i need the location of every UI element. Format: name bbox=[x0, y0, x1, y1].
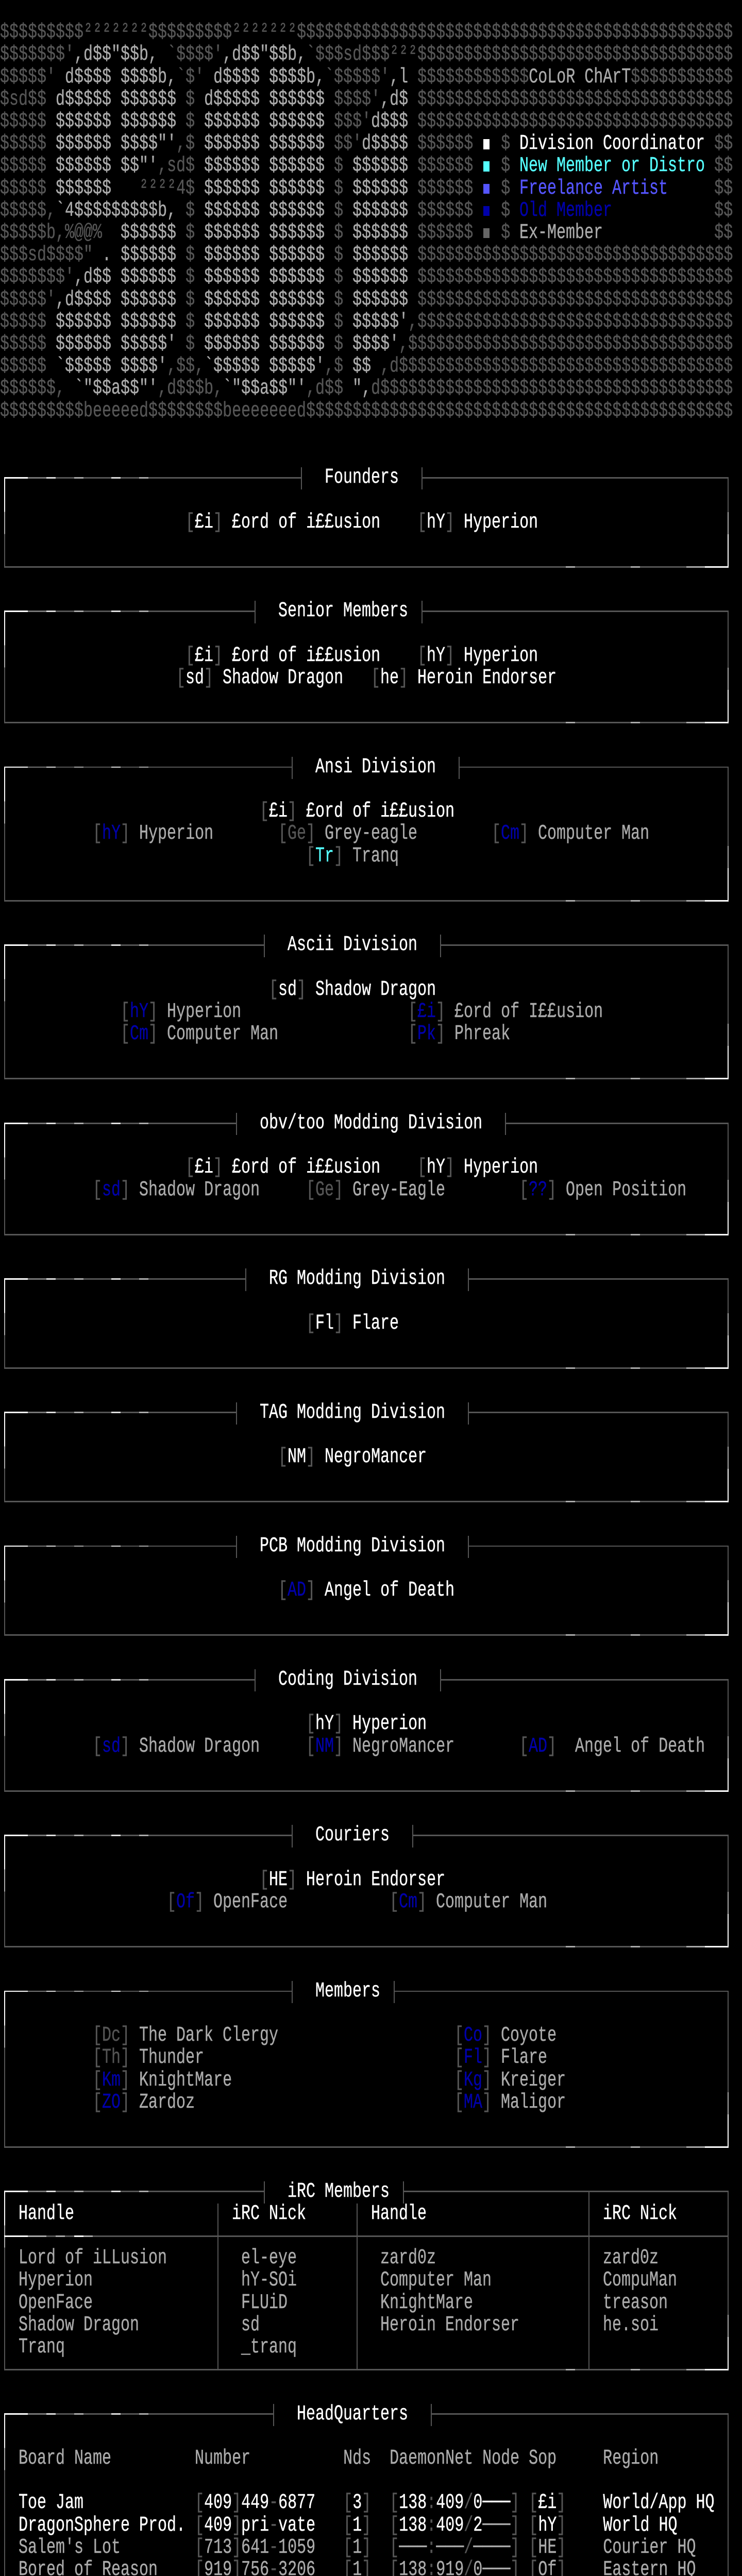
member: Lord of Illusion: [£i] £ord of i££usion bbox=[260, 800, 454, 824]
member: NegroMancer: [NM] NegroMancer bbox=[306, 1735, 454, 1758]
table row: FLUiD: FLUiD bbox=[241, 2291, 288, 2315]
ascii art logo banner: $$$$$' d$$$$ $$$$b,`$' d$$$$ $$$$b,`$$$$$',l $$$$$$$$$$$$CoLoR ChArT$$$$$$$$$$$ bbox=[0, 65, 733, 89]
table row: CompuMan: CompuMan bbox=[603, 2269, 677, 2293]
panel: Senior Members bbox=[4, 600, 729, 723]
legend: color chart key bbox=[483, 132, 705, 245]
member: OpenFace: [Of] OpenFace bbox=[167, 1890, 288, 1914]
member: Lord of Illusion: [£i] £ord of I££usion bbox=[408, 1000, 603, 1024]
member: Maligor: [MA] Maligor bbox=[454, 2091, 566, 2115]
heading: Founders: Founders bbox=[325, 466, 399, 490]
table row: he.soi: he.soi bbox=[603, 2313, 659, 2337]
panel: Ascii Division bbox=[4, 934, 729, 1079]
ascii art logo banner: $$$$$ $$$$$$ $$$$$$ $ $$$$$$ $$$$$$ $ $$$$$',$$$$$$$$$$$$$$$$$$$$$$$$$$$$$$$$$$ bbox=[0, 310, 733, 334]
member: Computer Man: [Cm] Computer Man bbox=[121, 1022, 278, 1046]
member: Coyote: [Co] Coyote bbox=[454, 2024, 556, 2048]
ascii art logo banner: $$$$$ $$$$$$ ²²²²4$ $$$$$$ $$$$$$ $ $$$$$$ $$$$$$ $ $$ bbox=[0, 177, 733, 200]
member: Grey-eagle: [Ge] Grey-eagle bbox=[278, 822, 417, 846]
member: Hyperion: [hY] Hyperion bbox=[417, 511, 538, 534]
ascii art logo banner: $$$$$$$',d$$"$$b, `$$$$',d$$"$$b,`$$$sd$$$²²²$$$$$$$$$$$$$$$$$$$$$$$$$$$$$$$$$$ bbox=[0, 43, 733, 67]
table row: sd: sd bbox=[241, 2313, 260, 2337]
board: Salem's Lot: Salem's Lot [713]641-1059 [1] [───:───/────] [HE] Courier HQ bbox=[19, 2536, 696, 2560]
heading: PCB Modding Division: PCB Modding Division bbox=[260, 1534, 445, 1558]
ascii art logo banner: $$$$$,`4$$$$$$$$$b, $ $$$$$$ $$$$$$ $ $$$$$$ $$$$$$ $ $$ bbox=[0, 199, 733, 223]
panel: Members bbox=[0, 1981, 742, 2159]
heading: TAG Modding Division: TAG Modding Division bbox=[260, 1401, 445, 1425]
panel: PCB Modding Division bbox=[4, 1534, 729, 1636]
table row: KnightMare: KnightMare bbox=[380, 2291, 473, 2315]
table header: Handle: Handle bbox=[371, 2202, 427, 2226]
member: Hyperion: [hY] Hyperion bbox=[306, 1713, 427, 1736]
member: Lord of Illusion: [£i] £ord of i££usion bbox=[185, 511, 380, 534]
ascii art logo banner: $$$$$ $$$$$$ $$$$$$ $ $$$$$$ $$$$$$ $$$'d$$$ $$$$$$$$$$$$$$$$$$$$$$$$$$$$$$$$$$ bbox=[0, 110, 733, 134]
ascii art logo banner: $$$$$',d$$$$ $$$$$$ $ $$$$$$ $$$$$$ $ $$$$$$ $$$$$$$$$$$$$$$$$$$$$$$$$$$$$$$$$$ bbox=[0, 288, 733, 312]
member: Grey-Eagle: [Ge] Grey-Eagle bbox=[306, 1178, 445, 1202]
ascii art logo banner: $$$$$ $$$$$$ $$"',sd$ $$$$$$ $$$$$$ $ $$$$$$ $$$$$$ $ $$ bbox=[0, 155, 733, 178]
member: Computer Man: [Cm] Computer Man bbox=[492, 822, 649, 846]
member: Lord of Illusion: [£i] £ord of i££usion bbox=[185, 1156, 380, 1180]
heading: iRC Members: iRC Members bbox=[288, 2180, 390, 2204]
legend item: Ex-Member bbox=[483, 221, 603, 245]
member: Thunder: [Th] Thunder bbox=[93, 2046, 204, 2070]
table row: Lord of iLLusion: Lord of iLLusion bbox=[19, 2246, 167, 2270]
heading: Ansi Division: Ansi Division bbox=[315, 755, 436, 779]
member: Shadow Dragon: [sd] Shadow Dragon bbox=[93, 1735, 260, 1758]
table row: OpenFace: OpenFace bbox=[19, 2291, 93, 2315]
member: Shadow Dragon: [sd] Shadow Dragon bbox=[93, 1178, 260, 1202]
heading: HeadQuarters: HeadQuarters bbox=[297, 2402, 408, 2426]
legend item: Freelance Artist: Freelance Artist bbox=[519, 177, 668, 200]
member: Flare: [Fl] Flare bbox=[306, 1312, 399, 1336]
member: Shadow Dragon: [sd] Shadow Dragon bbox=[269, 978, 436, 1002]
table row: _tranq: _tranq bbox=[241, 2335, 297, 2360]
ascii art logo banner: $$$$$ `$$$$$ $$$$',$$,`$$$$$ $$$$$',$ $$ ,d$$$$$$$$$$$$$$$$$$$$$$$$$$$$$$$$$$$$ bbox=[0, 354, 733, 379]
member: The Dark Clergy: [Dc] The Dark Clergy bbox=[93, 2024, 278, 2048]
member: Kreiger: [Kg] Kreiger bbox=[454, 2069, 566, 2092]
table row: zard0z: zard0z bbox=[380, 2246, 436, 2270]
table header: iRC Nick: iRC Nick bbox=[603, 2202, 677, 2226]
table row: hY-SOi: hY-SOi bbox=[241, 2269, 297, 2293]
ascii art logo banner: $$$$$ $$$$$$ $$$$"',$ $$$$$$ $$$$$$ $$'d$$$$ $$$$$$ $ $$ bbox=[0, 132, 733, 156]
heading: Ascii Division: Ascii Division bbox=[288, 934, 417, 957]
table row: Tranq: Tranq bbox=[19, 2335, 65, 2360]
legend item: Old Member: Old Member bbox=[519, 199, 612, 223]
panel: Founders bbox=[4, 466, 729, 568]
member: Phreak: [Pk] Phreak bbox=[408, 1022, 510, 1046]
member: Zardoz: [ZO] Zardoz bbox=[93, 2091, 195, 2115]
member: Hyperion: [hY] Hyperion bbox=[417, 644, 538, 668]
panel: RG Modding Division bbox=[4, 1267, 729, 1369]
heading: Senior Members: Senior Members bbox=[278, 600, 408, 623]
member: Shadow Dragon: [sd] Shadow Dragon bbox=[176, 666, 343, 690]
heading: RG Modding Division: RG Modding Division bbox=[269, 1267, 445, 1291]
heading: Couriers: Couriers bbox=[315, 1824, 390, 1848]
member: Computer Man: [Cm] Computer Man bbox=[390, 1890, 547, 1914]
table header: iRC Nick: iRC Nick bbox=[232, 2202, 306, 2226]
panel: Couriers bbox=[0, 1825, 742, 1959]
heading: Members: Members bbox=[315, 1979, 380, 2004]
panel: obv/too Modding Division bbox=[4, 1111, 729, 1235]
member: Angel of Death: [AD] Angel of Death bbox=[519, 1735, 705, 1758]
ascii art logo banner: $$$$$$$',d$$ $$$$$$ $ $$$$$$ $$$$$$ $ $$$$$$ $$$$$$$$$$$$$$$$$$$$$$$$$$$$$$$$$$ bbox=[0, 266, 733, 290]
panel: iRC Members table bbox=[0, 2181, 742, 2381]
table row: Heroin Endorser: Heroin Endorser bbox=[380, 2313, 519, 2337]
table row: treason: treason bbox=[603, 2291, 668, 2315]
member: Hyperion: [hY] Hyperion bbox=[121, 1000, 241, 1024]
member: Flare: [Fl] Flare bbox=[454, 2046, 547, 2070]
member: Heroin Endorser: [he] Heroin Endorser bbox=[371, 666, 556, 690]
table header: Handle: Handle bbox=[19, 2202, 74, 2226]
ascii art logo banner: $$$sd$$$$" . $$$$$$ $ $$$$$$ $$$$$$ $ $$$$$$ $$$$$$$$$$$$$$$$$$$$$$$$$$$$$$$$$$ bbox=[0, 243, 733, 267]
table row: Computer Man: Computer Man bbox=[380, 2269, 492, 2293]
member: Hyperion: [hY] Hyperion bbox=[93, 822, 213, 846]
member: KnightMare: [Km] KnightMare bbox=[93, 2069, 232, 2092]
member: Heroin Endorser: [HE] Heroin Endorser bbox=[260, 1868, 445, 1892]
heading: obv/too Modding Division: obv/too Modding Division bbox=[260, 1111, 482, 1136]
legend item: Division Coordinator: Division Coordinator bbox=[519, 132, 705, 156]
ascii art logo banner: $$$$$$, `"$$a$$"',d$$$b,`"$$a$$"',d$$ ",d$$$$$$$$$$$$$$$$$$$$$$$$$$$$$$$$$$$$$$ bbox=[0, 377, 733, 401]
board: Toe Jam: Toe Jam [409]449-6877 [3] [138:409/0───] [£i] World/App HQ bbox=[19, 2492, 714, 2515]
board: DragonSphere Prod.: DragonSphere Prod. [409]pri-vate [1] [138:409/2───] [hY] World HQ bbox=[19, 2514, 677, 2537]
member: NegroMancer: [NM] NegroMancer bbox=[278, 1445, 427, 1469]
heading: Coding Division: Coding Division bbox=[278, 1668, 417, 1692]
member: Open Position: [??] Open Position bbox=[519, 1178, 686, 1202]
ascii art logo banner: $$$$$$$$$²²²²²²²$$$$$$$$$²²²²²²²$$$$$$$$$$$$$$$$$$$$$$$$$$$$$$$$$$$$$$$$$$$$$$$ bbox=[0, 21, 733, 45]
table row: Hyperion: Hyperion bbox=[19, 2269, 93, 2293]
panel: Coding Division bbox=[4, 1668, 729, 1792]
ascii art logo banner: $$$$$b,%@@% $$$$$$ $ $$$$$$ $$$$$$ $ $$$$$$ $$$$$$ $ $$ bbox=[0, 221, 733, 245]
legend item: Ex-Member: Ex-Member bbox=[519, 221, 603, 245]
ascii art logo banner: $$$$$ $$$$$$ $$$$$' $ $$$$$$ $$$$$$ $ $$$$',$$$$$$$$$$$$$$$$$$$$$$$$$$$$$$$$$$$ bbox=[0, 332, 733, 357]
ascii art logo banner: $$$$$$$$$beeeeed$$$$$$$$beeeeeeed$$$$$$$$$$$$$$$$$$$$$$$$$$$$$$$$$$$$$$$$$$$$$$ bbox=[0, 399, 733, 423]
member: Hyperion: [hY] Hyperion bbox=[417, 1156, 538, 1180]
panel: TAG Modding Division bbox=[4, 1401, 729, 1502]
ascii art logo banner: $sd$$ d$$$$$ $$$$$$ $ d$$$$$ $$$$$$ $$$$',d$ $$$$$$$$$$$$$$$$$$$$$$$$$$$$$$$$$$ bbox=[0, 88, 733, 112]
table row: Shadow Dragon: Shadow Dragon bbox=[19, 2313, 139, 2337]
ascii art logo banner bbox=[0, 21, 733, 423]
legend item: New Member or Distro: New Member or Distro bbox=[519, 155, 705, 178]
member: Tranq: [Tr] Tranq bbox=[306, 844, 399, 868]
table row: el-eye: el-eye bbox=[241, 2246, 297, 2270]
table row: zard0z nick: zard0z bbox=[603, 2246, 659, 2270]
member: Lord of Illusion: [£i] £ord of i££usion bbox=[185, 644, 380, 668]
member: Angel of Death: [AD] Angel of Death bbox=[278, 1579, 454, 1603]
table header: Board Name Number Nds DaemonNet Node Sop Region bbox=[19, 2447, 659, 2471]
panel: Ansi Division bbox=[4, 755, 729, 902]
panel: HeadQuarters bbox=[0, 2404, 742, 2576]
